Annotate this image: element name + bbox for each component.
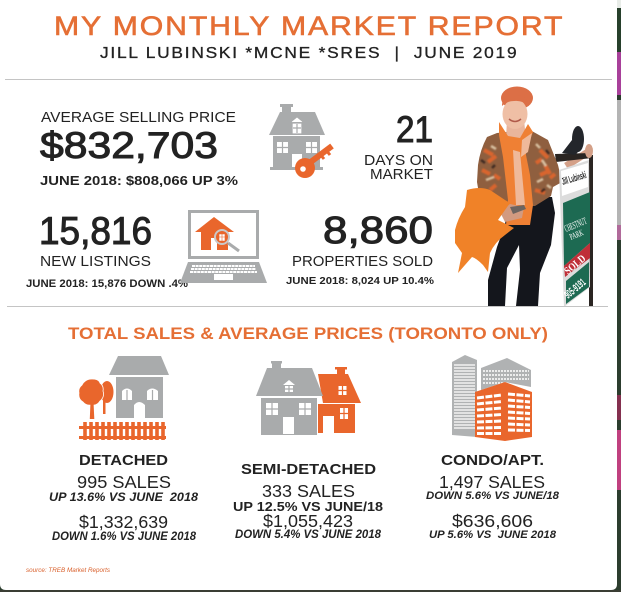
stat: properties sold: PROPERTIES SOLD (292, 253, 433, 270)
icon: house with key (269, 104, 332, 178)
stat: properties sold: JUNE 2018: 8,024 UP 10.4% (286, 276, 434, 287)
scarf (499, 122, 533, 225)
column: condo/apartment: CONDO/APT. (441, 452, 544, 469)
sign board: SOLD (562, 253, 588, 277)
icon: laptop with house search (180, 212, 267, 283)
column: semi-detached (233, 361, 383, 541)
stat: days on market: DAYS ON (364, 152, 433, 169)
subtitle: JILL LUBINSKI *MCNE *SRES | JUNE 2019 (100, 45, 517, 62)
section heading: TOTAL SALES & AVERAGE PRICES (TORONTO ONLY) (68, 325, 548, 343)
icon: condo towers (452, 355, 532, 441)
hand and phone (500, 204, 524, 222)
stat: new listings: NEW LISTINGS (40, 253, 151, 270)
column: semi-detached: $1,055,423 (263, 511, 353, 531)
column: condo/apartment (426, 355, 560, 541)
column: semi-detached: DOWN 5.4% VS JUNE 2018 (235, 529, 382, 541)
column: detached: DOWN 1.6% VS JUNE 2018 (52, 531, 197, 543)
icon: semi-detached houses (256, 361, 361, 435)
neck and face (501, 86, 533, 138)
column: condo/apartment: 1,497 SALES (439, 472, 545, 492)
orange jacket (455, 188, 514, 273)
stat: average selling price: AVERAGE SELLING PRICE (41, 110, 236, 126)
sign board: CHESTNUT (563, 216, 588, 235)
stat: new listings: JUNE 2018: 15,876 DOWN .4% (26, 278, 189, 290)
sign board: PARK (568, 227, 585, 242)
stat: average selling price (40, 110, 238, 188)
column: condo/apartment: UP 5.6% VS JUNE 2018 (429, 529, 557, 541)
column: condo/apartment: DOWN 5.6% VS JUNE/18 (426, 490, 560, 502)
sign board: Jill Lubinski (561, 170, 588, 188)
column: detached: DETACHED (79, 452, 168, 469)
stat: new listings (26, 210, 189, 290)
stat: average selling price: JUNE 2018: $808,066 UP 3% (40, 174, 238, 188)
icon: detached house with trees and fence (79, 356, 169, 440)
agent portrait with sold sign (455, 86, 593, 307)
sign board: 905-9191 (562, 277, 588, 301)
column: semi-detached: UP 12.5% VS JUNE/18 (233, 499, 383, 514)
column: condo/apartment: $636,606 (452, 511, 533, 531)
stat: days on market: 21 (396, 109, 433, 150)
column: detached (49, 356, 199, 543)
column: detached: 995 SALES (77, 472, 171, 492)
column: semi-detached: 333 SALES (262, 481, 355, 501)
sign post (555, 126, 593, 306)
stat: properties sold: 8,860 (323, 210, 433, 252)
stat: days on market (364, 109, 433, 183)
blouse (477, 130, 562, 206)
source note: source: TREB Market Reports (26, 568, 110, 574)
title: MY MONTHLY MARKET REPORT (54, 12, 562, 42)
trousers (488, 197, 555, 306)
stat: average selling price: $832,703 (40, 125, 218, 166)
column: detached: $1,332,639 (79, 512, 168, 532)
stat: days on market: MARKET (370, 166, 433, 183)
sign board (559, 160, 590, 307)
stat: properties sold (286, 210, 434, 287)
column: detached: UP 13.6% VS JUNE 2018 (49, 492, 199, 504)
column: semi-detached: SEMI-DETACHED (241, 461, 376, 478)
stat: new listings: 15,816 (39, 210, 152, 253)
